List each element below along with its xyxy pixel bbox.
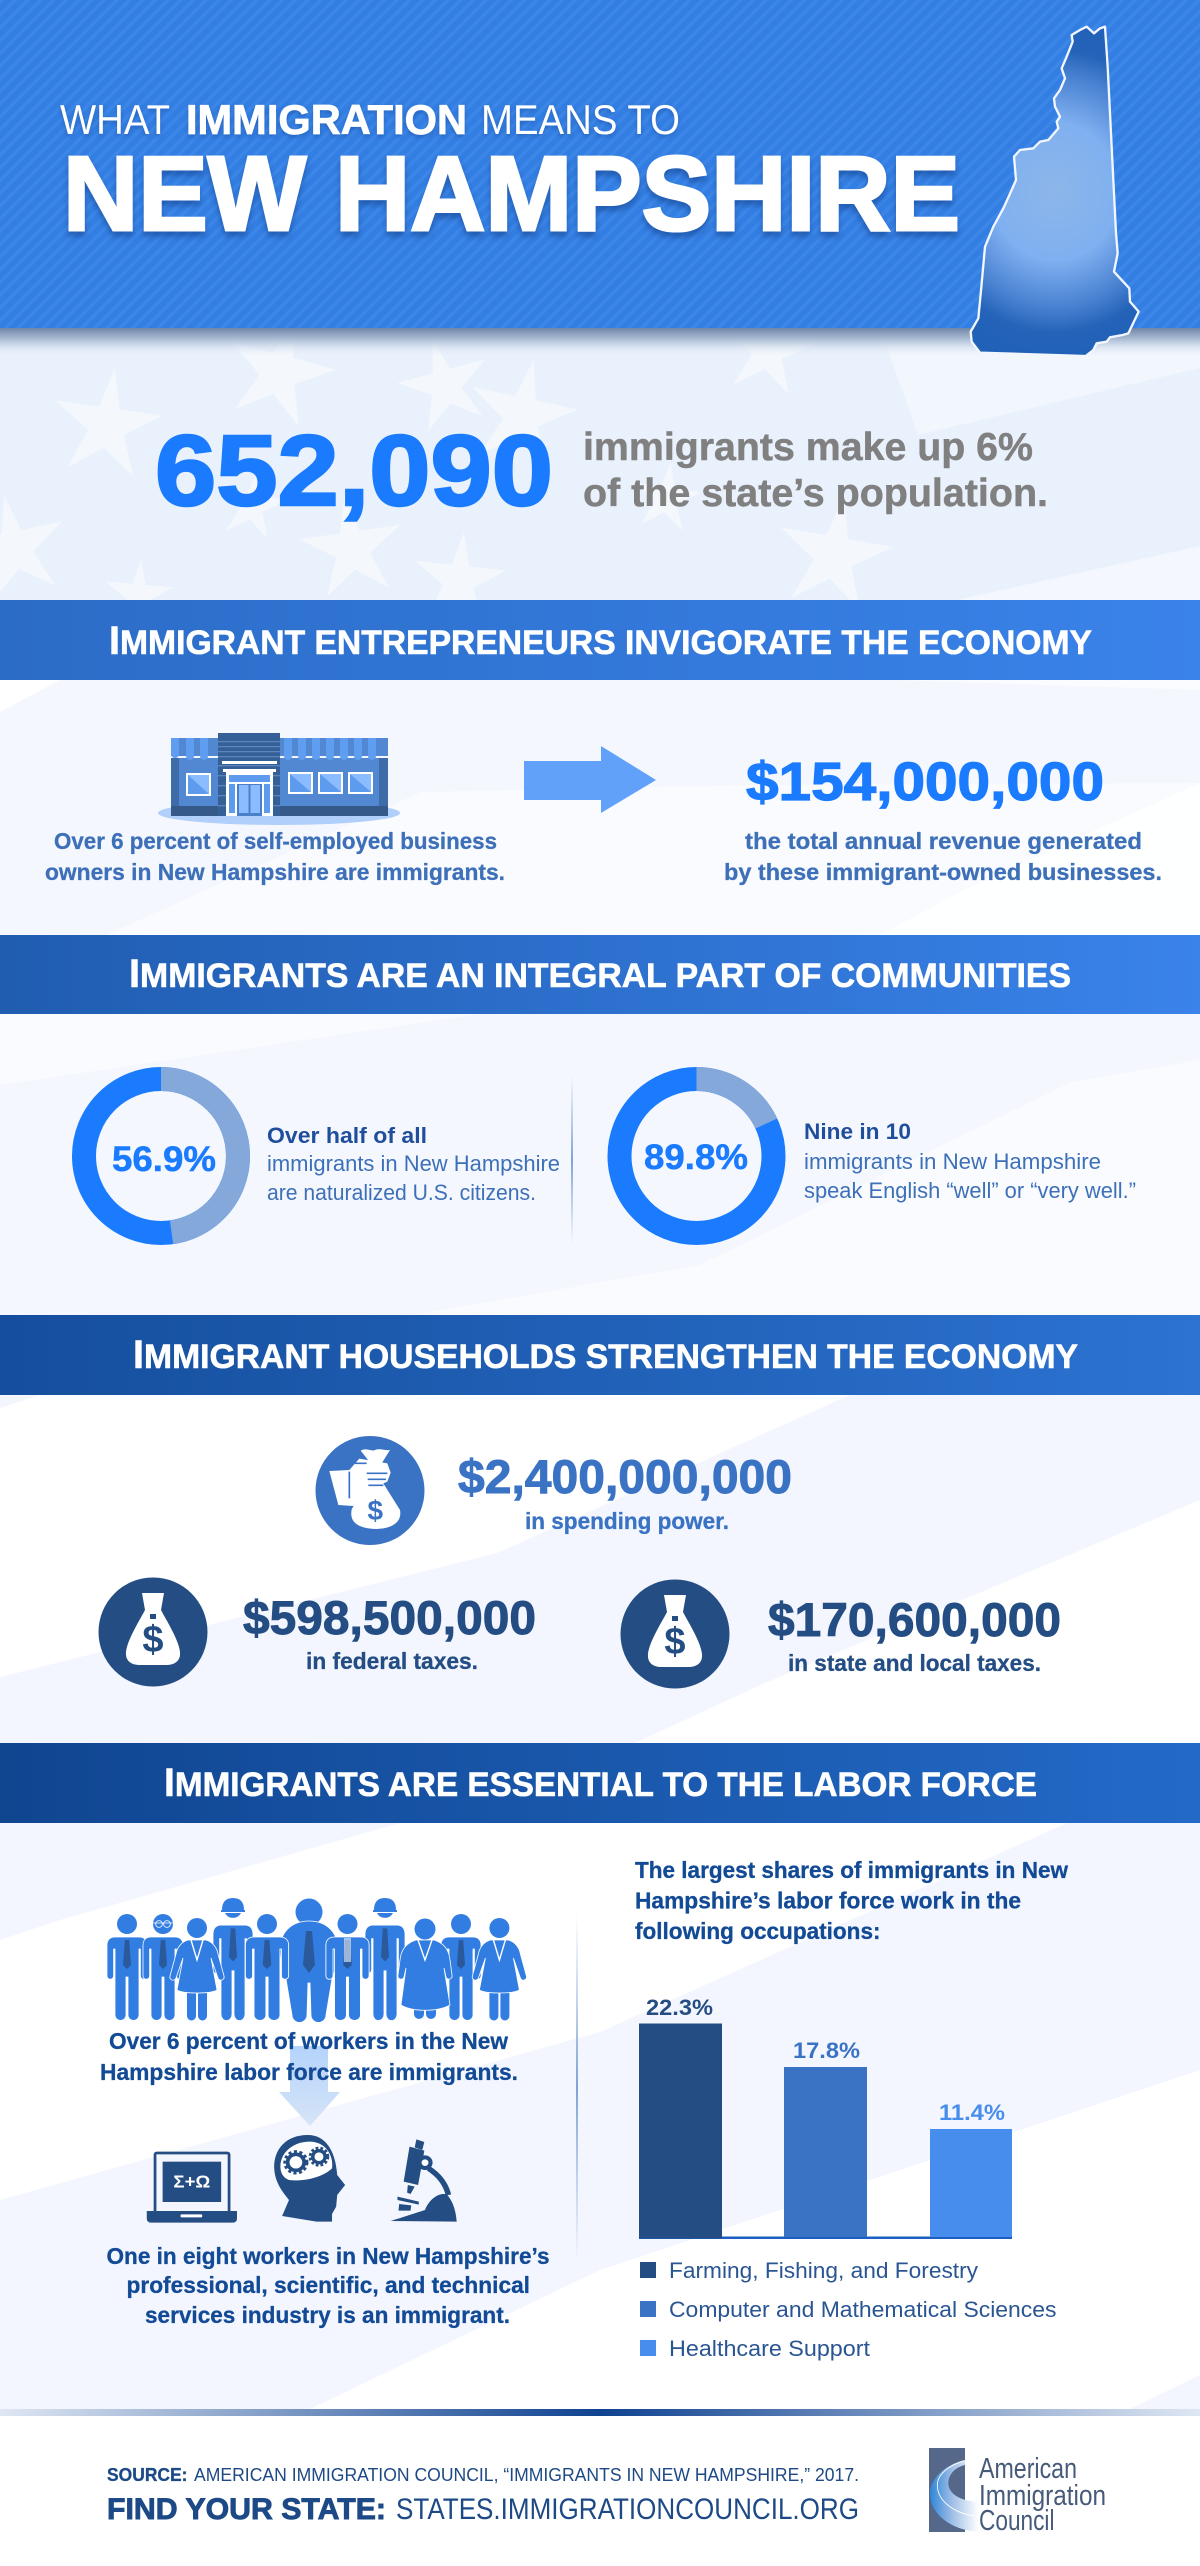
title: what immigration means to [60, 96, 680, 143]
icon: money bag federal [98, 1578, 208, 1686]
icon: money bag state and local [620, 1580, 730, 1688]
text: self-employed business owners: Over 6 percent of self-employed business [54, 828, 497, 854]
panel: population background with stars [0, 295, 1200, 628]
icon: head with gears [274, 2135, 345, 2222]
text: nine in 10 immigrants [804, 1119, 1136, 1203]
stat: federal taxes [243, 1591, 536, 1674]
icon: group of workers [107, 1898, 527, 2023]
chart: donut 89.8% [620, 1079, 774, 1233]
text: over 6 percent of workers: Over 6 percent of workers in the New [109, 2028, 508, 2054]
legend: Computer and Mathematical Sciences [669, 2297, 1056, 2322]
icon: money bag federal: $ [142, 1619, 164, 1661]
icon: microscope [391, 2139, 457, 2222]
section heading bar: labor force: IMMIGRANTS ARE ESSENTIAL TO THE LABOR FORCE [164, 1761, 1037, 1805]
text: one in eight workers [106, 2243, 550, 2328]
text: over 6 percent of workers [100, 2028, 518, 2085]
arrow: right [524, 746, 656, 813]
text: over half of all immigrants [267, 1123, 560, 1205]
stat: state and local taxes: $170,600,000 [768, 1593, 1061, 1646]
text: total annual revenue: by these immigrant-owned businesses. [724, 859, 1162, 885]
logo: american immigration council: Council [979, 2505, 1054, 2537]
title: what immigration means to: MEANS TO [481, 96, 680, 143]
icon: hand holding money bag: $ [368, 1495, 384, 1526]
stat: federal taxes: $598,500,000 [243, 1591, 536, 1644]
stat: spending power [458, 1450, 792, 1534]
text: immigrants make up 6% of the state's population: of the state’s population. [583, 472, 1048, 515]
text: total annual revenue [724, 828, 1162, 885]
stat: 652,090: 652,090 [155, 415, 553, 527]
section heading bar: households [0, 1315, 1200, 1395]
bar chart: occupations: 22.3% [646, 1995, 713, 2020]
header shadow [0, 328, 1200, 356]
icon: hand holding money bag [316, 1436, 424, 1545]
text: over half of all immigrants: are naturalized U.S. citizens. [267, 1180, 536, 1205]
section heading bar: entrepreneurs [0, 600, 1200, 680]
panel: households background [0, 1395, 1200, 1743]
text: over half of all immigrants: immigrants in New Hampshire [267, 1151, 560, 1176]
text: chart heading: Hampshire’s labor force work in the [635, 1888, 1021, 1914]
text: one in eight workers: services industry is an immigrant. [145, 2302, 510, 2328]
stat: spending power: $2,400,000,000 [458, 1450, 792, 1503]
title: what immigration means to: IMMIGRATION [186, 96, 467, 143]
arrow: down [279, 2046, 340, 2126]
legend: Healthcare Support [669, 2336, 870, 2361]
logo: american immigration council [929, 2448, 1106, 2537]
stat: state and local taxes [768, 1593, 1061, 1676]
icon: state of new hampshire map [971, 27, 1139, 356]
panel: labor force background [0, 1823, 1200, 2409]
icon: laptop with formula: Σ+Ω [173, 2171, 210, 2191]
chart: donut 56.9%: 56.9% [112, 1140, 216, 1179]
section heading bar: entrepreneurs: IMMIGRANT ENTREPRENEURS INVIGORATE THE ECONOMY [109, 619, 1092, 663]
text: over 6 percent of workers: Hampshire labor force are immigrants. [100, 2059, 518, 2085]
title: what immigration means to: WHAT [60, 96, 170, 143]
chart: donut 56.9% [84, 1079, 238, 1233]
text: immigrants make up 6% of the state's population [583, 426, 1048, 515]
text: self-employed business owners [45, 828, 505, 885]
icon: money bag state and local: $ [664, 1621, 686, 1663]
text: source: AMERICAN IMMIGRATION COUNCIL, “IMMIGRANTS IN NEW HAMPSHIRE,” 2017. [194, 2465, 859, 2485]
stat: spending power: in spending power. [525, 1508, 729, 1534]
legend [640, 2258, 1056, 2361]
section heading bar: households: IMMIGRANT HOUSEHOLDS STRENGTHEN THE ECONOMY [133, 1333, 1078, 1377]
text: nine in 10 immigrants: Nine in 10 [804, 1119, 911, 1144]
text: nine in 10 immigrants: immigrants in New Hampshire [804, 1149, 1101, 1174]
stat: $154,000,000: $154,000,000 [746, 752, 1104, 812]
stat: federal taxes: in federal taxes. [306, 1648, 478, 1674]
text: chart heading [635, 1857, 1068, 1944]
text: find your state: FIND YOUR STATE: [107, 2493, 386, 2526]
section heading bar: communities [0, 935, 1200, 1014]
section heading bar: labor force [0, 1743, 1200, 1823]
text: nine in 10 immigrants: speak English “well” or “very well.” [804, 1178, 1136, 1203]
text: chart heading: The largest shares of immigrants in New [635, 1857, 1068, 1883]
icon: storefront [158, 733, 400, 825]
logo: american immigration council: American [979, 2453, 1077, 2485]
bar chart: occupations [639, 1995, 1012, 2239]
bar chart: occupations: 17.8% [793, 2038, 860, 2063]
text: find your state [107, 2493, 859, 2526]
text: source: SOURCE: [107, 2465, 188, 2485]
legend: Farming, Fishing, and Forestry [669, 2258, 978, 2283]
section heading bar: communities: IMMIGRANTS ARE AN INTEGRAL PART OF COMMUNITIES [129, 952, 1071, 996]
stat: state and local taxes: in state and local taxes. [788, 1650, 1041, 1676]
text: self-employed business owners: owners in New Hampshire are immigrants. [45, 859, 505, 885]
panel: communities background [0, 1014, 1200, 1315]
footer divider [0, 2409, 1200, 2416]
title: new hampshire: NEW HAMPSHIRE [63, 135, 960, 253]
logo: american immigration council: Immigration [979, 2480, 1106, 2512]
text: total annual revenue: the total annual revenue generated [745, 828, 1142, 854]
bar chart: occupations: 11.4% [939, 2100, 1005, 2125]
text: find your state: STATES.IMMIGRATIONCOUNCIL.ORG [396, 2493, 859, 2526]
text: one in eight workers: One in eight workers in New Hampshire’s [106, 2243, 550, 2269]
icon: laptop with formula [147, 2153, 237, 2223]
text: immigrants make up 6% of the state's population: immigrants make up 6% [583, 426, 1033, 469]
text: chart heading: following occupations: [635, 1918, 880, 1944]
text: over half of all immigrants: Over half of all [267, 1123, 427, 1148]
text: one in eight workers: professional, scientific, and technical [126, 2272, 530, 2298]
chart: donut 89.8%: 89.8% [644, 1138, 748, 1177]
header banner [0, 0, 1200, 328]
panel: entrepreneurs background [0, 680, 1200, 935]
